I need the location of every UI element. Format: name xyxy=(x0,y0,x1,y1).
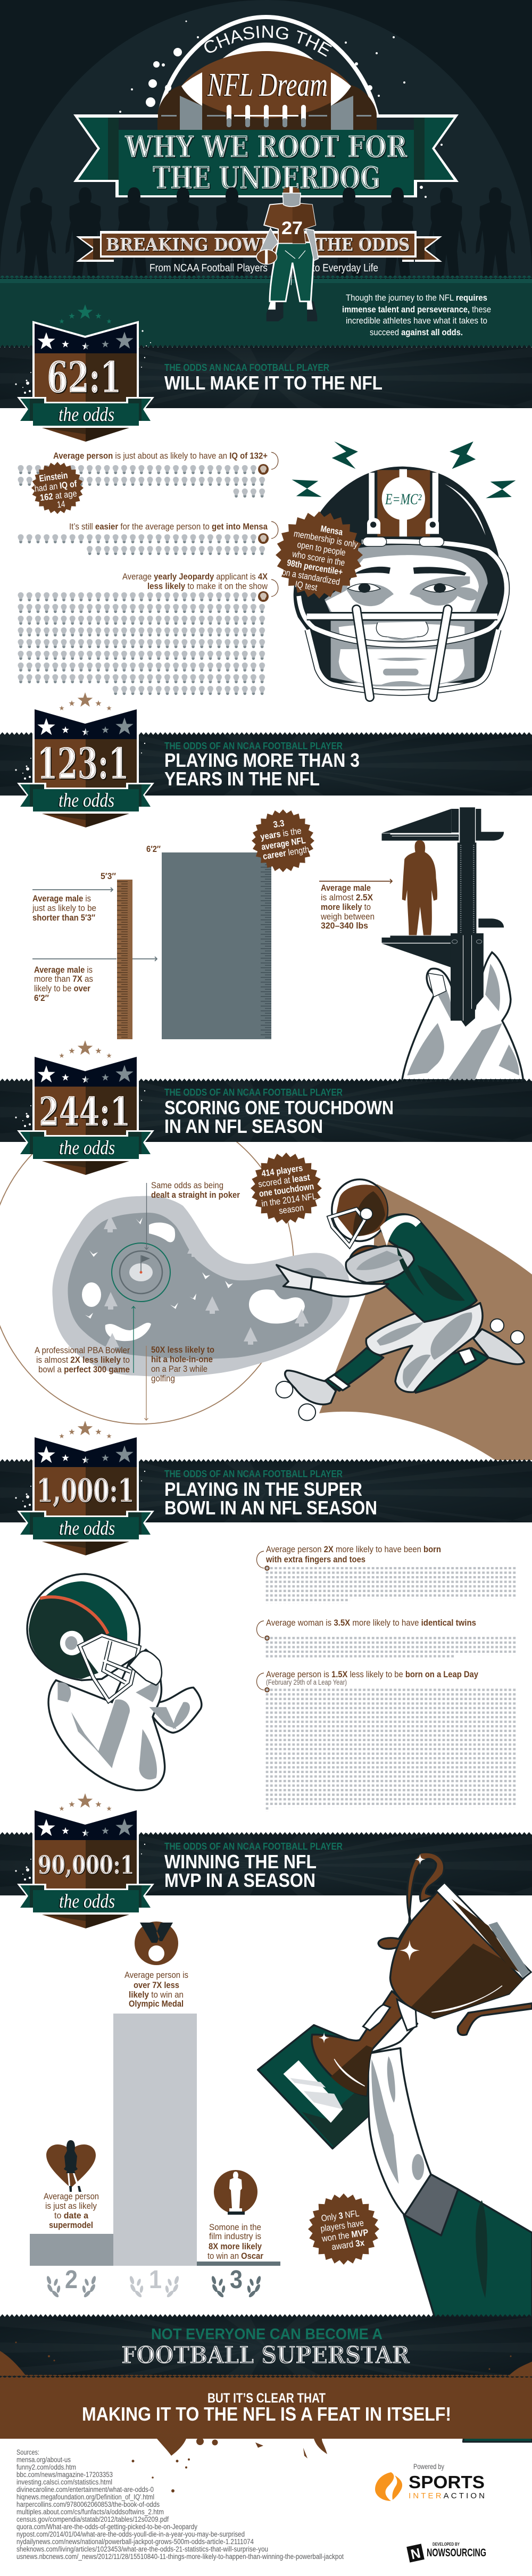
title ribbon: THE UNDERDOG xyxy=(153,160,380,196)
note: hole in one: 50X less likely to xyxy=(151,1345,214,1355)
heading: playing more than 3 years: YEARS IN THE NFL xyxy=(164,768,320,790)
callout: MVP 3x: won the MVP xyxy=(321,2227,369,2244)
closing message: not everyone xyxy=(121,2326,410,2369)
intro paragraph: Though the journey to the NFL requires xyxy=(346,293,487,303)
heading: playing in the super bowl: BOWL IN AN NFL SEASON xyxy=(164,1497,377,1519)
closing message: not everyone: FOOTBALL SUPERSTAR xyxy=(121,2342,410,2369)
heading: playing more than 3 years xyxy=(164,740,360,790)
icon: oscar statue xyxy=(214,2170,257,2215)
note: olympic medal: Olympic Medal xyxy=(129,1999,184,2009)
note: supermodel: to date a xyxy=(54,2210,89,2221)
note: weigh between 320-340 lbs: weigh between xyxy=(320,912,375,922)
decorative stars above badge 4 xyxy=(59,1421,112,1438)
chart: golf course circle outline xyxy=(0,1107,294,1424)
dot chart: extra fingers and toes: Average person 2X more likely to have been born xyxy=(266,1544,441,1554)
sources list: nypost.com/2014/01/04/what-are-the-odds-youll-die-in-a-year-you-may-be-surprised xyxy=(16,2530,245,2538)
title arch: chasing the xyxy=(159,15,379,114)
bulb chart: Mensa xyxy=(16,521,278,556)
height chart: 5'3" ruler xyxy=(101,871,132,1039)
heading: playing in the super bowl xyxy=(164,1468,377,1519)
white paint splatter behind title xyxy=(119,20,443,198)
golf course map xyxy=(52,1196,350,1377)
dot chart: leap day xyxy=(256,1669,516,1812)
odds badge 123:1: 123:1 xyxy=(37,739,129,789)
odds badge 123:1 xyxy=(15,707,154,827)
intro paragraph: immense talent and perseverance, these xyxy=(342,304,491,314)
callout: 414 players: in the 2014 NFL xyxy=(261,1191,317,1209)
podium bar chart xyxy=(30,2014,280,2266)
section band 4 xyxy=(0,1459,532,1522)
breaking down the odds ribbon xyxy=(76,231,442,262)
intro paragraph xyxy=(342,293,491,337)
heading: playing more than 3 years: THE ODDS OF AN NCAA FOOTBALL PLAYER xyxy=(164,740,343,751)
nowsourcing logo: NOWSOURCING xyxy=(427,2547,486,2559)
decorative stars above badge 1 xyxy=(59,304,112,324)
central player number 27 xyxy=(256,186,318,321)
closing message: feat in itself: BUT IT’S CLEAR THAT xyxy=(207,2391,326,2406)
note: perfect 300 game: is almost 2X less likely to xyxy=(36,1355,130,1365)
sports interaction logo xyxy=(375,2462,485,2501)
section band 1 xyxy=(0,345,532,408)
callout: Mensa: on a standardized xyxy=(281,567,340,587)
heading: scoring one touchdown xyxy=(164,1087,394,1137)
callout: MVP 3x: award 3x xyxy=(331,2238,365,2252)
note: hole in one: golfing xyxy=(151,1373,175,1384)
odds badge 90,000:1: 90,000:1 xyxy=(38,1851,134,1880)
odds badge 62:1 xyxy=(15,321,154,442)
odds badge 1,000:1: the odds xyxy=(59,1518,115,1539)
note: oscar: to win an Oscar xyxy=(207,2251,263,2261)
heading: scoring one touchdown: IN AN NFL SEASON xyxy=(164,1115,323,1137)
odds badge 244:1: 244:1 xyxy=(39,1089,130,1135)
sports interaction logo: SPORTS xyxy=(409,2472,485,2492)
closing message: feat in itself xyxy=(82,2391,451,2425)
section band 5 xyxy=(0,1832,532,1895)
note: shorter than 5'3": just as likely to be xyxy=(32,903,96,913)
illustration: helmet with face: E=MC² xyxy=(385,491,422,508)
odds badge 1,000:1: 1,000:1 xyxy=(37,1472,134,1510)
odds badge 244:1: the odds xyxy=(59,1137,115,1159)
note: dealt a straight in poker: dealt a straight in poker xyxy=(151,1190,240,1200)
note: shorter than 5'3": Average male is xyxy=(32,893,91,904)
callout: Einstein: Einstein xyxy=(38,470,68,484)
callout: Mensa: open to people xyxy=(296,540,346,558)
dot chart: leap day: Average person is 1.5X less likely to be born on a Leap Day xyxy=(266,1669,478,1679)
note: perfect 300 game xyxy=(35,1306,135,1374)
callout: 414 players xyxy=(251,1153,322,1224)
NFL Dream script: NFL Dream xyxy=(207,67,328,103)
callout: MVP 3x: Only 3 NFL xyxy=(321,2208,360,2224)
heading: winning the NFL MVP xyxy=(164,1841,343,1891)
callout: MVP 3x xyxy=(308,2193,379,2265)
odds badge 62:1: 62:1 xyxy=(47,352,121,402)
callout: career length xyxy=(252,809,314,872)
note: olympic medal: likely to win an xyxy=(129,1990,184,2000)
sports interaction logo: INTER ACTION xyxy=(409,2491,485,2500)
callout: Mensa: IQ test xyxy=(294,579,318,593)
note: oscar: Somone in the xyxy=(209,2222,261,2232)
callout: career length: years is the xyxy=(260,825,302,842)
note: weigh between 320-340 lbs xyxy=(319,879,392,931)
callout: Mensa: who score in the xyxy=(291,549,346,568)
dot chart: leap day: (February 29th of a Leap Year) xyxy=(266,1678,347,1686)
note: hole in one: on a Par 3 while xyxy=(151,1364,207,1374)
note: weigh between 320-340 lbs: more likely to xyxy=(321,902,371,912)
note: olympic medal xyxy=(124,1970,188,2009)
bulb chart: Mensa: It’s still easier for the average person to get into Mensa xyxy=(69,521,268,532)
height chart: 5'3" ruler: 5′3″ xyxy=(101,871,116,881)
decorative stars above badge 2 xyxy=(59,692,112,710)
sports interaction logo: Powered by xyxy=(413,2462,444,2471)
heading: will make it to the NFL: THE ODDS AN NCAA FOOTBALL PLAYER xyxy=(164,362,329,373)
green turf section xyxy=(0,276,532,347)
callout: Mensa: membership is only xyxy=(293,528,359,550)
note: supermodel xyxy=(44,2191,99,2230)
note: weigh between 320-340 lbs: is almost 2.5X xyxy=(321,892,373,902)
bulb chart: Jeopardy: less likely to make it on the show xyxy=(147,581,268,591)
callout: MVP 3x: players have xyxy=(320,2218,364,2234)
callout: Mensa: Mensa xyxy=(320,524,344,537)
heading: winning the NFL MVP: MVP IN A SEASON xyxy=(164,1869,315,1891)
callout: 414 players: one touchdown xyxy=(259,1181,314,1199)
note: weigh between 320-340 lbs: Average male xyxy=(321,883,371,893)
dot chart: identical twins xyxy=(256,1618,516,1660)
paint splatter on closing band xyxy=(0,2341,532,2492)
nowsourcing logo: DEVELOPED BY xyxy=(433,2541,460,2547)
note: hole in one xyxy=(145,1345,214,1420)
callout: Mensa xyxy=(276,511,363,599)
illustration: hand holding caliper xyxy=(382,807,523,1080)
heading: playing more than 3 years: PLAYING MORE THAN 3 xyxy=(164,749,360,771)
icon: olympic medal xyxy=(135,1921,178,1965)
callout: 414 players: season xyxy=(278,1203,304,1216)
note: perfect 300 game: bowl a perfect 300 game xyxy=(38,1364,130,1374)
note: olympic medal: Average person is xyxy=(124,1970,188,1980)
height chart: 6'2" bar: 6′2″ xyxy=(146,844,161,854)
icon: lightning bolts xyxy=(292,442,516,498)
bulb chart: IQ of 132+: Average person is just about as likely to have an IQ of 132+ xyxy=(53,451,268,461)
odds badge 90,000:1: the odds xyxy=(59,1891,115,1912)
odds badge 90,000:1 xyxy=(15,1808,154,1928)
note: supermodel: supermodel xyxy=(49,2220,93,2230)
sources list: mensa.org/about-us xyxy=(16,2456,71,2464)
note: supermodel: is just as likely xyxy=(45,2201,97,2211)
odds badge 123:1: the odds xyxy=(59,790,114,811)
rank laurels 3: 3 xyxy=(230,2266,243,2294)
note: supermodel: Average person xyxy=(44,2191,99,2201)
callout: Einstein: 162 at age xyxy=(39,488,78,503)
sources list: hiqnews.megafoundation.org/Definition_of_IQ'.html xyxy=(16,2493,154,2501)
title ribbon: WHY WE ROOT FOR xyxy=(124,129,408,164)
illustration: running football player xyxy=(276,1179,524,1421)
subtitle: From NCAA Football Players xyxy=(149,262,268,274)
bulb chart: Jeopardy xyxy=(16,571,278,696)
height chart: 6'2" bar xyxy=(146,844,271,1039)
note: oscar: 8X more likely xyxy=(209,2241,262,2251)
heading: playing in the super bowl: THE ODDS OF AN NCAA FOOTBALL PLAYER xyxy=(164,1468,343,1479)
note: shorter than 5'3" xyxy=(32,888,113,923)
header background with arch xyxy=(0,0,532,282)
sources list: sheknows.com/living/articles/1023453/what-are-the-odds-21-statistics-that-will-surprise-you xyxy=(16,2545,268,2553)
note: over 6'2": more than 7X as xyxy=(34,974,93,984)
callout: 414 players: 414 players xyxy=(261,1163,303,1179)
heading: scoring one touchdown: THE ODDS OF AN NCAA FOOTBALL PLAYER xyxy=(164,1087,343,1098)
sources list xyxy=(16,2448,344,2561)
callout: career length: 3.3 xyxy=(272,818,285,830)
heading: winning the NFL MVP: WINNING THE NFL xyxy=(164,1851,317,1873)
heading: will make it to the NFL xyxy=(164,362,383,394)
callout: career length: career length xyxy=(262,844,310,862)
closing message: not everyone: NOT EVERYONE CAN BECOME A xyxy=(151,2326,383,2343)
note: perfect 300 game: A professional PBA Bowler xyxy=(35,1345,130,1355)
heading: scoring one touchdown: SCORING ONE TOUCHDOWN xyxy=(164,1097,394,1119)
odds badge 1,000:1 xyxy=(15,1435,154,1555)
sources list: harpercollins.com/9780062060853/the-book-of-odds xyxy=(16,2500,160,2508)
rank laurels 2: 2 xyxy=(65,2266,78,2294)
note: oscar: film industry is xyxy=(209,2231,261,2241)
title ribbon xyxy=(73,114,459,197)
rank laurels 1 xyxy=(129,2266,180,2298)
illustration: helmet with face xyxy=(294,467,510,697)
section band 2 xyxy=(0,732,532,796)
note: weigh between 320-340 lbs: 320–340 lbs xyxy=(321,921,368,931)
nowsourcing logo xyxy=(406,2541,486,2563)
sources list: nydailynews.com/news/national/powerball-jackpot-grows-500m-odds-article-1.2111074 xyxy=(16,2538,254,2546)
note: olympic medal: over 7X less xyxy=(134,1980,179,1990)
note: shorter than 5'3": shorter than 5′3″ xyxy=(32,913,95,923)
bulb chart: IQ of 132+ xyxy=(16,451,278,499)
sources list: funny2.com/odds.htm xyxy=(16,2463,76,2471)
rank laurels 2 xyxy=(46,2266,97,2298)
sources list: usnews.nbcnews.com/_news/2012/11/28/15510840-11-things-more-likely-to-happen-than-winning-the-powerball-jackpot xyxy=(16,2553,344,2561)
callout: Einstein xyxy=(31,462,84,514)
rank laurels 3 xyxy=(211,2266,262,2298)
note: over 6'2": Average male is xyxy=(34,965,93,975)
section band 3 xyxy=(0,1079,532,1142)
nowsourcing logo: N xyxy=(409,2545,422,2563)
dot chart: extra fingers and toes xyxy=(256,1544,516,1603)
tan swoosh behind running player xyxy=(319,1184,532,1460)
sources list: census.gov/compendia/statab/2012/tables/12s0209.pdf xyxy=(16,2515,169,2523)
sources list: investing.calsci.com/statistics.html xyxy=(16,2478,112,2486)
decorative stars above badge 3 xyxy=(59,1040,112,1058)
note: dealt a straight in poker xyxy=(145,1180,240,1249)
sources list: Sources: xyxy=(16,2448,39,2456)
decorative stars above badge 5 xyxy=(59,1793,112,1811)
heading: will make it to the NFL: WILL MAKE IT TO THE NFL xyxy=(164,372,383,394)
subtitle: to Everyday Life xyxy=(312,262,378,274)
closing message: feat in itself: MAKING IT TO THE NFL IS A FEAT IN ITSELF! xyxy=(82,2403,451,2425)
callout: Mensa: 98th percentile+ xyxy=(286,558,344,577)
note: hole in one: hit a hole-in-one xyxy=(151,1354,213,1364)
intro paragraph: succeed against all odds. xyxy=(370,327,463,337)
heading: winning the NFL MVP: THE ODDS OF AN NCAA FOOTBALL PLAYER xyxy=(164,1841,343,1852)
title arch: chasing the: CHASING THE xyxy=(204,26,332,57)
callout: Einstein: had an IQ of xyxy=(34,479,78,494)
sources list: quora.com/What-are-the-odds-of-getting-picked-to-be-on-Jeopardy xyxy=(16,2523,197,2531)
sources list: divinecaroline.com/entertainment/what-are-odds-0 xyxy=(16,2486,154,2494)
infographic canvas: 27 xyxy=(281,218,303,238)
breaking down the odds ribbon: THE ODDS xyxy=(315,234,410,255)
note: over 6'2": likely to be over xyxy=(34,983,90,993)
closing band xyxy=(0,2314,532,2439)
sources list: multiples.about.com/cs/funfacts/a/oddsoftwins_2.htm xyxy=(16,2508,164,2516)
rank laurels 1: 1 xyxy=(149,2266,162,2294)
bulb chart: Jeopardy: Average yearly Jeopardy applicant is 4X xyxy=(122,571,268,582)
icon: heart with supermodel xyxy=(46,2140,96,2192)
note: over 6'2" xyxy=(32,957,157,1003)
intro paragraph: incredible athletes have what it takes to xyxy=(346,316,487,326)
dot chart: extra fingers and toes: with extra fingers and toes xyxy=(265,1554,365,1564)
sources list: bbc.com/news/magazine-17203353 xyxy=(16,2471,113,2479)
player silhouettes xyxy=(16,187,515,277)
subtitle xyxy=(149,262,378,274)
note: over 6'2": 6′2″ xyxy=(34,993,49,1003)
breaking down the odds ribbon: BREAKING DOWN xyxy=(106,234,275,255)
illustration: arm holding trophy xyxy=(258,1852,532,2442)
note: dealt a straight in poker: Same odds as being xyxy=(151,1180,223,1190)
heading: playing in the super bowl: PLAYING IN THE SUPER xyxy=(164,1478,362,1500)
odds badge 62:1: the odds xyxy=(59,404,114,426)
callout: career length: average NFL xyxy=(261,835,306,852)
callout: 414 players: scored at least xyxy=(257,1172,311,1189)
football xyxy=(157,51,377,131)
dot chart: identical twins: Average woman is 3.5X more likely to have identical twins xyxy=(266,1618,476,1628)
odds badge 244:1 xyxy=(15,1054,154,1175)
note: oscar xyxy=(207,2222,263,2261)
illustration: baby in helmet xyxy=(27,1574,202,1790)
callout: Einstein: 14 xyxy=(56,499,65,510)
